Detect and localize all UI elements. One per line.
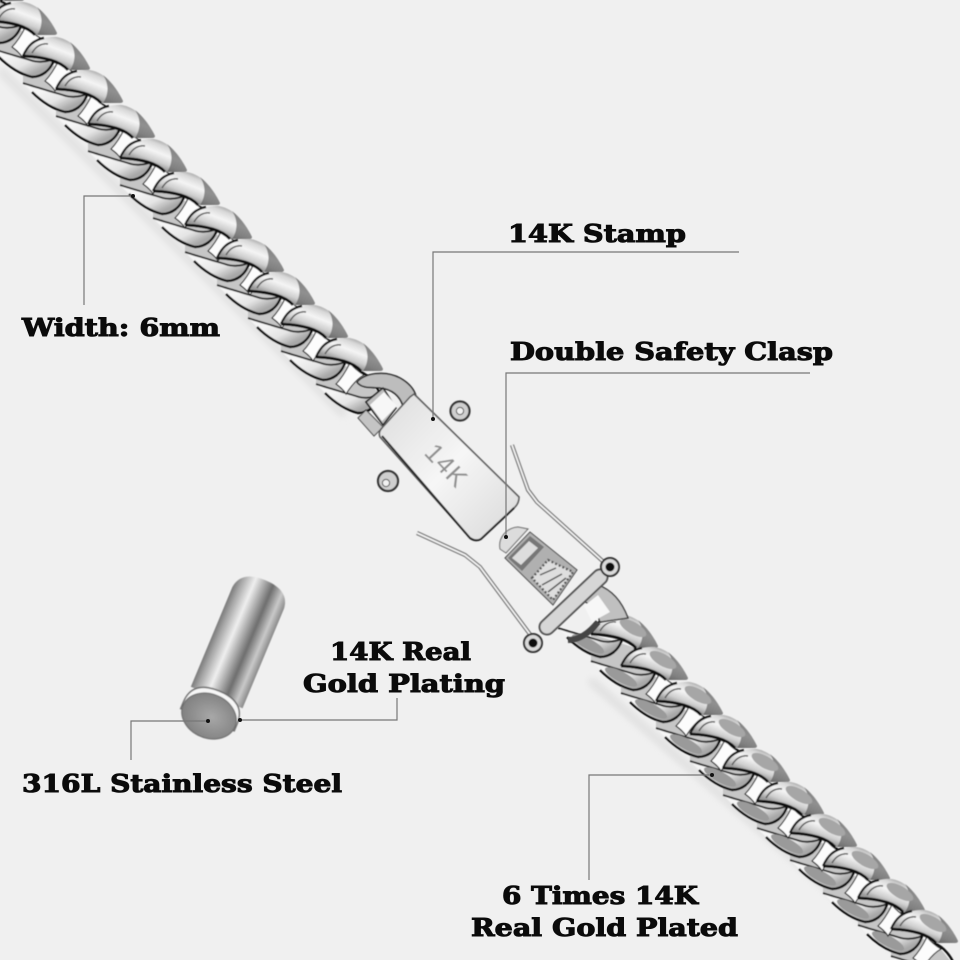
stamp text: 14K — [419, 437, 474, 494]
loop arm — [358, 410, 383, 436]
hinge ring: right — [601, 558, 619, 576]
tongue block — [505, 532, 577, 605]
leader: width — [84, 194, 135, 305]
tongue dome — [500, 527, 528, 553]
lower chain — [558, 615, 958, 960]
label: 14K real gold plating — [303, 637, 505, 698]
pin body — [191, 570, 291, 708]
loop hole — [370, 392, 397, 421]
leader: 14K stamp — [431, 252, 739, 421]
knob: upper — [450, 402, 470, 420]
label: 14K real gold plating: 14K Real — [330, 637, 471, 666]
label: width: Width: 6mm — [21, 313, 220, 342]
plate shadow edge — [382, 436, 514, 540]
clasp plate — [379, 394, 519, 540]
cross bar — [547, 577, 600, 627]
right wire — [512, 445, 607, 565]
pin end cap — [175, 685, 243, 747]
label: 6 times 14K real gold plated — [471, 881, 738, 942]
upper chain — [0, 0, 383, 415]
label: 316L stainless steel: 316L Stainless Steel — [22, 769, 342, 798]
pin ring — [181, 680, 246, 731]
left wire — [417, 533, 532, 637]
hinge ring: left — [524, 634, 542, 652]
leader: 6 times plated — [589, 773, 714, 880]
label: 14K stamp: 14K Stamp — [508, 219, 686, 248]
clasp — [357, 373, 628, 652]
connecting loop: upper — [357, 373, 416, 425]
leader: gold plating — [238, 698, 397, 722]
knob: lower — [378, 471, 398, 491]
leader: stainless steel — [131, 719, 210, 760]
pin — [174, 569, 292, 747]
end loop — [582, 585, 628, 622]
leader: double safety clasp — [504, 373, 810, 539]
label: 14K real gold plating: Gold Plating — [303, 669, 505, 698]
label: double safety clasp: Double Safety Clasp — [510, 337, 833, 366]
label: 6 times 14K real gold plated: Real Gold Plated — [471, 913, 738, 942]
label: 6 times 14K real gold plated: 6 Times 14K — [502, 881, 699, 910]
